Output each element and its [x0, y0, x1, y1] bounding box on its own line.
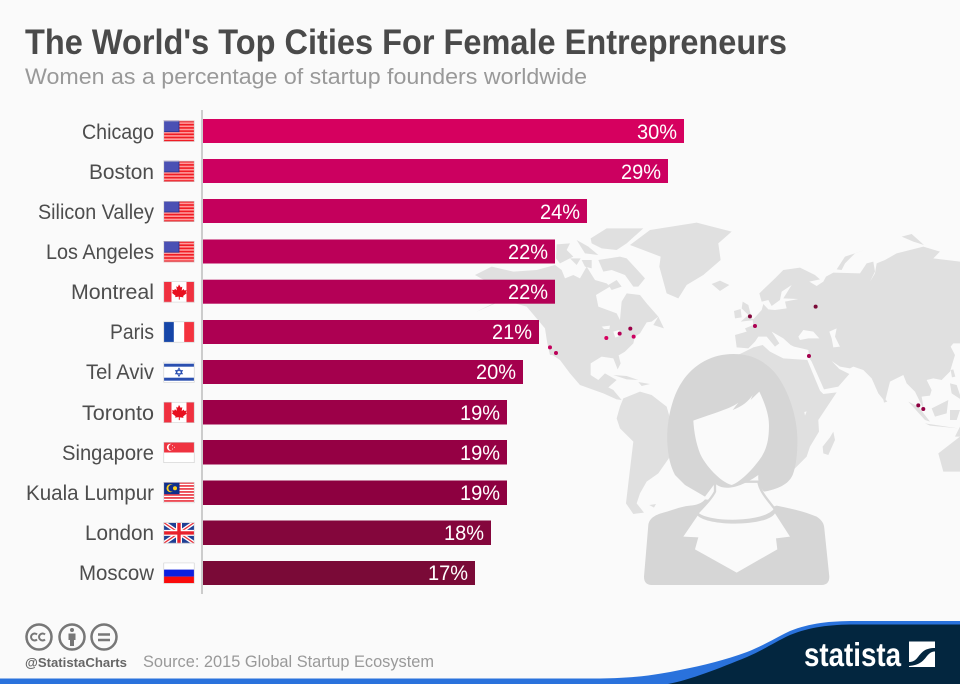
row: Silicon Valley: 24%	[540, 201, 580, 224]
statista logo: statista	[804, 636, 902, 673]
row: Montreal: 22%	[508, 281, 548, 304]
icon: woman silhouette	[644, 354, 829, 585]
bar chart	[26, 119, 684, 585]
row: Moscow: Moscow	[79, 562, 155, 585]
row: Kuala Lumpur: Kuala Lumpur	[26, 482, 154, 505]
Central and South America	[550, 353, 683, 514]
Africa and Madagascar	[720, 345, 837, 470]
handle: @StatistaCharts	[25, 655, 127, 670]
row: Silicon Valley: Silicon Valley	[38, 201, 154, 224]
world map background	[475, 223, 960, 514]
Eurasia	[734, 234, 960, 410]
row: Boston: 29%	[621, 161, 661, 184]
row: Boston	[89, 159, 668, 184]
footer band	[0, 621, 960, 684]
city location dots	[548, 305, 925, 411]
row: Silicon Valley	[38, 199, 587, 224]
row: Tel Aviv	[86, 360, 523, 384]
row: Los Angeles: Los Angeles	[46, 241, 154, 264]
row: Tel Aviv: 20%	[476, 361, 516, 384]
row: Montreal	[71, 280, 555, 304]
row: Kuala Lumpur: 19%	[460, 482, 500, 505]
row: Paris: 21%	[492, 321, 532, 344]
North America and Greenland	[475, 223, 732, 355]
row: Chicago: Chicago	[82, 121, 154, 144]
row: London	[85, 520, 491, 545]
row: Singapore	[62, 440, 507, 465]
row: Toronto	[82, 400, 507, 425]
row: Moscow	[79, 561, 475, 585]
row: Toronto: Toronto	[82, 402, 154, 425]
row: Los Angeles: 22%	[508, 241, 548, 264]
row: Chicago: 30%	[637, 121, 677, 144]
row: Paris: Paris	[110, 321, 154, 344]
row: Toronto: 19%	[460, 402, 500, 425]
row: Montreal: Montreal	[71, 281, 154, 304]
row: Los Angeles	[46, 240, 555, 264]
row: Singapore: Singapore	[62, 442, 154, 465]
row: London: London	[85, 522, 154, 545]
row: Chicago	[82, 119, 684, 144]
row: London: 18%	[444, 522, 484, 545]
row: Moscow: 17%	[428, 562, 468, 585]
icon: creative commons licence	[26, 624, 116, 650]
subtitle: Women as a percentage of startup founders worldwide	[25, 64, 587, 89]
row: Singapore: 19%	[460, 442, 500, 465]
axis line	[201, 110, 203, 594]
source: Source: 2015 Global Startup Ecosystem	[143, 653, 434, 671]
row: Kuala Lumpur	[26, 480, 507, 505]
row: Paris	[110, 320, 539, 344]
row: Boston: Boston	[89, 161, 154, 184]
South-East Asia and Australia	[883, 383, 960, 472]
title: The World's Top Cities For Female Entrepreneurs	[25, 23, 787, 62]
row: Tel Aviv: Tel Aviv	[86, 361, 154, 384]
